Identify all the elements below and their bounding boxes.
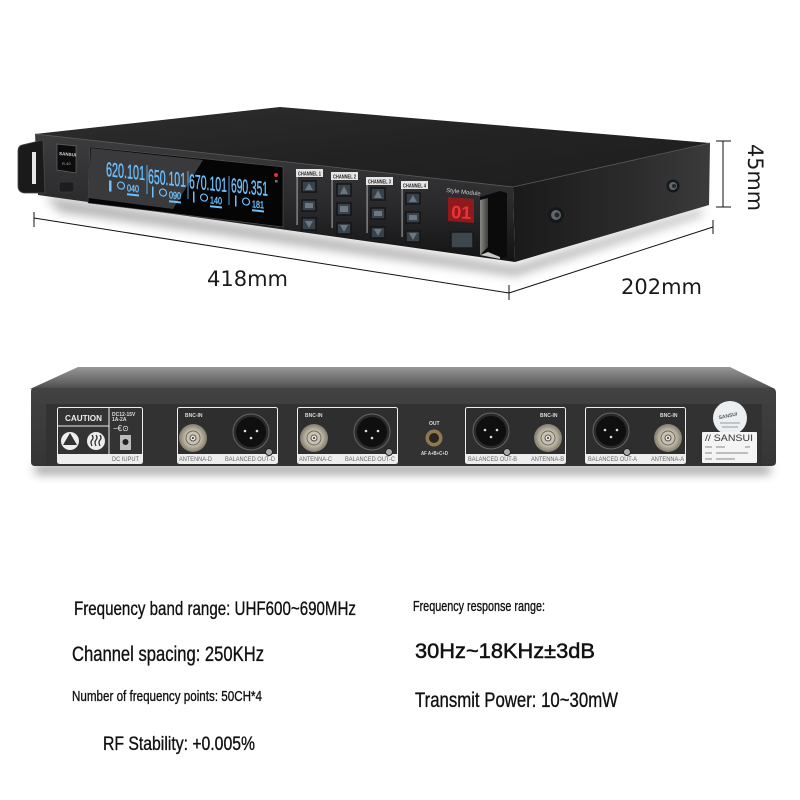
spec: transmit power: Transmit Power: 10~30mW — [415, 689, 618, 712]
connector panel B: ANTENNA-B — [531, 457, 564, 463]
connector panel C: BALANCED OUT-C — [345, 457, 396, 463]
channel 3 controls: CHANNEL 3 — [368, 180, 391, 186]
audio out jack: OUT — [429, 421, 440, 427]
caution panel: 1A-2A — [112, 417, 127, 423]
audio out jack — [421, 421, 448, 457]
product label: // SANSUI — [705, 433, 753, 443]
right rack handle — [480, 191, 507, 259]
left rack handle — [18, 140, 45, 193]
connector panel A: BALANCED OUT-A — [588, 457, 637, 463]
spec: frequency response label: Frequency response range: — [413, 598, 545, 615]
connector panel D: BALANCED OUT-D — [225, 457, 276, 463]
spec: frequency band range: Frequency band range: UHF600~690MHz — [74, 599, 356, 620]
channel 2 controls — [331, 172, 358, 234]
frequency readout 4: 690.351 — [231, 175, 268, 201]
dimension: height line — [716, 141, 731, 207]
channel 2 controls: CHANNEL 2 — [333, 174, 356, 180]
connector panel D: BNC-IN — [185, 413, 203, 419]
product label — [702, 432, 757, 463]
brand badge: SANSUI — [59, 151, 76, 157]
channel 4 controls: CHANNEL 4 — [403, 184, 426, 190]
connector panel A: ANTENNA-A — [651, 457, 684, 463]
glass reflection — [88, 148, 203, 209]
style button — [451, 232, 473, 248]
frequency readout 1 — [106, 159, 145, 197]
rear back face — [31, 388, 776, 466]
frequency readout 2: 650.101 — [148, 166, 186, 192]
caution panel: CAUTION — [65, 413, 102, 423]
frequency readout 4: 181 — [252, 199, 264, 211]
frequency readout 3: 670.101 — [189, 171, 227, 197]
frequency readout 3 — [189, 171, 227, 209]
height label: 45mm — [743, 144, 767, 211]
spec: frequency points: Number of frequency points: 50CH*4 — [72, 688, 262, 705]
channel 3 controls — [366, 177, 393, 238]
connector panel B: BALANCED OUT-B — [468, 457, 517, 463]
frequency readout 1: 620.101 — [106, 159, 145, 185]
caution panel: DC12-15V — [112, 412, 136, 418]
round sticker: SANSUI — [718, 411, 739, 421]
width label: 418mm — [207, 267, 288, 291]
spec: frequency response value: 30Hz~18KHz±3dB — [415, 640, 595, 663]
frequency readout 3: 140 — [210, 195, 222, 207]
caution panel: −€⊙ — [113, 424, 129, 433]
brand badge: R-40 — [62, 161, 71, 166]
frequency readout 4 — [231, 175, 268, 213]
power button — [59, 182, 74, 192]
connector panel C: ANTENNA-C — [299, 457, 333, 463]
side screws — [548, 180, 680, 223]
connector panel B — [466, 408, 566, 464]
top face — [35, 107, 710, 187]
audio out jack: AF A+B+C+D — [421, 451, 448, 457]
style module label: Style Module — [446, 188, 482, 198]
connector panel C — [298, 408, 398, 464]
rear unit shadow — [35, 465, 770, 474]
dimension: width line — [34, 212, 509, 300]
frequency readout 2: 090 — [169, 190, 181, 202]
connector panel A: BNC-IN — [660, 413, 678, 419]
dimension: depth line — [509, 220, 713, 293]
spec: RF stability: RF Stability: +0.005% — [103, 734, 255, 755]
connector panel A — [586, 408, 686, 464]
rear top face — [30, 367, 775, 389]
connector panel B: BNC-IN — [540, 413, 558, 419]
connector panel D — [178, 408, 278, 464]
round sticker — [713, 401, 747, 435]
LCD display — [88, 147, 283, 227]
caution panel — [58, 407, 142, 464]
connector panel C: BNC-IN — [305, 413, 323, 419]
channel 1 controls: CHANNEL 1 — [298, 172, 321, 178]
spec: channel spacing: Channel spacing: 250KHz — [72, 643, 264, 666]
brand badge — [57, 144, 76, 173]
rear inner panel — [46, 404, 762, 466]
channel 4 controls — [401, 181, 428, 242]
red channel display — [448, 197, 474, 223]
side face — [513, 143, 710, 262]
frequency readout 1: 040 — [127, 183, 139, 195]
front panel — [35, 134, 515, 262]
red channel display: 01 — [451, 202, 472, 223]
frequency readout 2 — [148, 166, 186, 204]
rear unit — [30, 367, 776, 474]
connector panel D: ANTENNA-D — [179, 457, 213, 463]
depth label: 202mm — [621, 275, 702, 299]
channel 1 controls — [296, 169, 323, 230]
caution panel: DC IUPUT — [112, 457, 139, 463]
front unit: receiver in perspective — [18, 107, 710, 276]
front unit shadow — [45, 196, 705, 276]
